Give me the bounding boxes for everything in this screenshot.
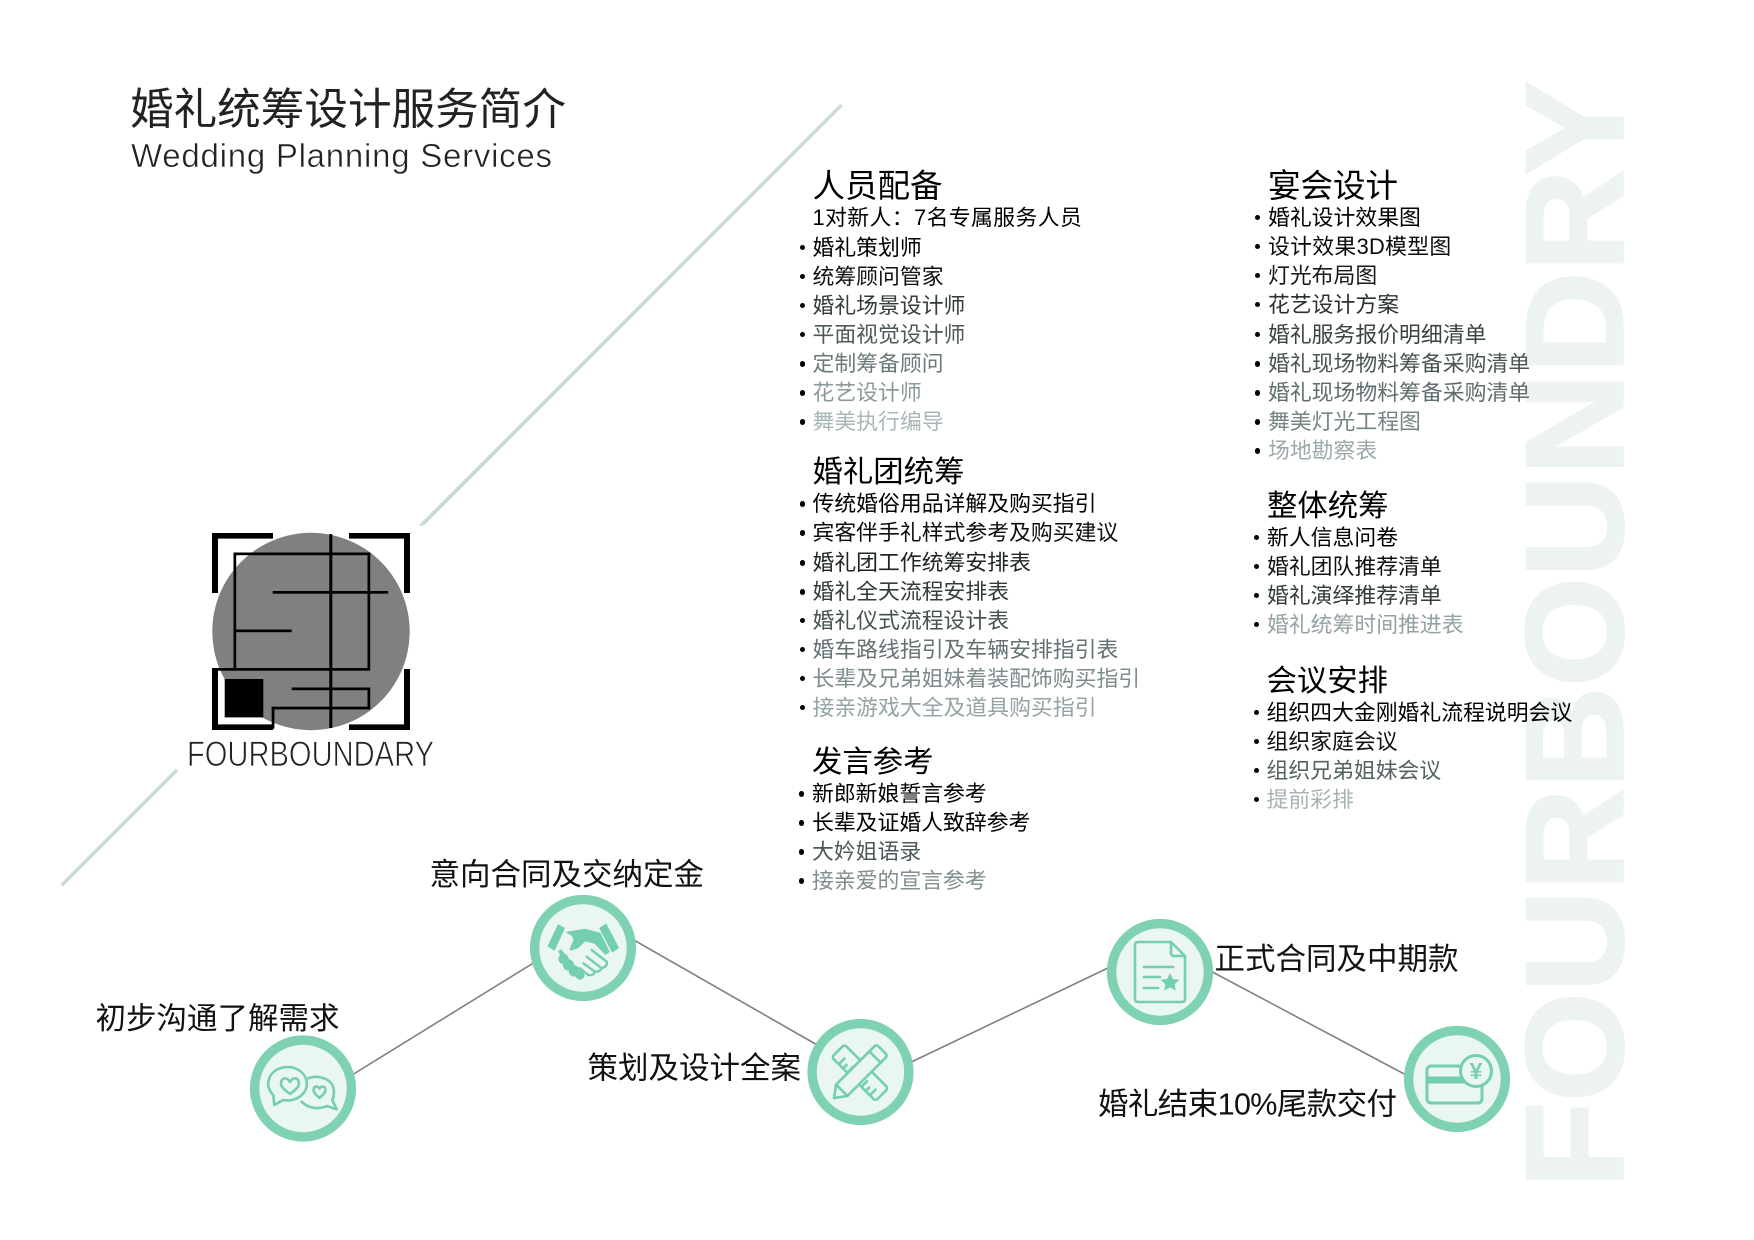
panel: overall coordination: 婚礼统筹时间推进表 <box>1267 612 1464 637</box>
diagonal line: lower <box>60 768 178 886</box>
subtitle: Wedding Planning Services <box>131 137 552 174</box>
panel: wedding party coordination: 婚礼全天流程安排表 <box>812 579 1009 604</box>
label: step 2: 意向合同及交纳定金 <box>430 858 704 892</box>
panel: speech references: 大妗姐语录 <box>812 839 921 864</box>
panel: wedding party coordination: 长辈及兄弟姐妹着装配饰购买指引 <box>812 666 1140 691</box>
panel: staffing: 定制筹备顾问 <box>812 351 944 376</box>
panel: banquet design: 花艺设计方案 <box>1268 292 1399 317</box>
heading: speeches: 发言参考 <box>812 745 934 779</box>
step 5: card and yen: ¥ <box>1470 1058 1483 1084</box>
panel: wedding party coordination: 婚礼仪式流程设计表 <box>812 608 1009 633</box>
diagonal line: upper <box>418 104 843 526</box>
panel: banquet design: 场地勘察表 <box>1268 438 1377 463</box>
label: step 4: 正式合同及中期款 <box>1214 942 1458 976</box>
panel: wedding party coordination: 婚车路线指引及车辆安排指引表 <box>812 637 1118 662</box>
logo wordmark: FOURBOUNDARY <box>187 735 434 774</box>
panel: speech references <box>799 745 1030 893</box>
panel: wedding party coordination: 传统婚俗用品详解及购买指引 <box>812 491 1096 516</box>
heading: meetings: 会议安排 <box>1266 664 1388 698</box>
watermark: FOURBOUNDRY: FOURBOUNDRY <box>1498 81 1652 1188</box>
panel: wedding party coordination: 婚礼团工作统筹安排表 <box>812 550 1031 575</box>
panel: banquet design: 婚礼设计效果图 <box>1268 205 1421 230</box>
panel: overall coordination: 婚礼团队推荐清单 <box>1267 554 1442 579</box>
panel: staffing: 花艺设计师 <box>812 380 922 405</box>
panel: speech references: 新郎新娘誓言参考 <box>812 781 987 806</box>
panel: banquet design <box>1255 168 1530 463</box>
panel: overall coordination <box>1254 489 1464 637</box>
panel: staffing: 婚礼策划师 <box>812 235 922 260</box>
panel: overall coordination: 新人信息问卷 <box>1267 525 1398 550</box>
heading: overall: 整体统筹 <box>1267 489 1389 523</box>
panel: meetings: 组织家庭会议 <box>1266 729 1398 754</box>
logo: FOURBOUNDARY mark <box>187 533 434 774</box>
panel: staffing: 舞美执行编导 <box>812 409 944 434</box>
heading: wedding party: 婚礼团统筹 <box>812 455 964 489</box>
heading: banquet: 宴会设计 <box>1268 168 1398 204</box>
connector lines <box>352 939 1408 1076</box>
panel: banquet design: 舞美灯光工程图 <box>1268 409 1421 434</box>
step 3: ruler and pencil <box>812 1024 909 1120</box>
label: step 3: 策划及设计全案 <box>588 1052 801 1086</box>
panel: meetings <box>1254 664 1572 812</box>
panel: staffing: 婚礼场景设计师 <box>812 293 965 318</box>
step 2: handshake <box>535 900 631 996</box>
panel: banquet design: 灯光布局图 <box>1268 263 1377 288</box>
panel: overall coordination: 婚礼演绎推荐清单 <box>1267 583 1442 608</box>
panel: meetings: 提前彩排 <box>1266 787 1354 812</box>
label: step 1: 初步沟通了解需求 <box>96 1002 340 1036</box>
panel: staffing: 平面视觉设计师 <box>812 322 965 347</box>
panel: wedding party coordination <box>800 455 1140 720</box>
panel: banquet design: 婚礼服务报价明细清单 <box>1268 322 1486 347</box>
panel: speech references: 长辈及证婚人致辞参考 <box>812 810 1030 835</box>
step 5: card and yen <box>1409 1031 1505 1127</box>
panel: meetings: 组织兄弟姐妹会议 <box>1266 758 1441 783</box>
panel: staffing <box>800 168 1082 434</box>
panel: banquet design: 设计效果3D模型图 <box>1268 234 1452 259</box>
panel: wedding party coordination: 接亲游戏大全及道具购买指引 <box>812 695 1096 720</box>
panel: wedding party coordination: 宾客伴手礼样式参考及购买建议 <box>812 520 1118 545</box>
label: step 5: 婚礼结束10%尾款交付 <box>1098 1088 1397 1122</box>
step 4: contract document with star <box>1112 924 1208 1020</box>
step 1: chat hearts <box>255 1040 351 1137</box>
title: 婚礼统筹设计服务简介 <box>130 86 566 134</box>
panel: banquet design: 婚礼现场物料筹备采购清单 <box>1268 351 1530 376</box>
heading: staffing: 人员配备 <box>812 168 943 204</box>
panel: speech references: 接亲爱的宣言参考 <box>812 868 987 893</box>
panel: banquet design: 婚礼现场物料筹备采购清单 <box>1268 380 1530 405</box>
step labels <box>96 858 1458 1122</box>
subheading: 1对新人：7名专属服务人员 <box>812 205 1082 230</box>
panel: staffing: 统筹顾问管家 <box>812 264 944 289</box>
panel: meetings: 组织四大金刚婚礼流程说明会议 <box>1266 700 1572 725</box>
